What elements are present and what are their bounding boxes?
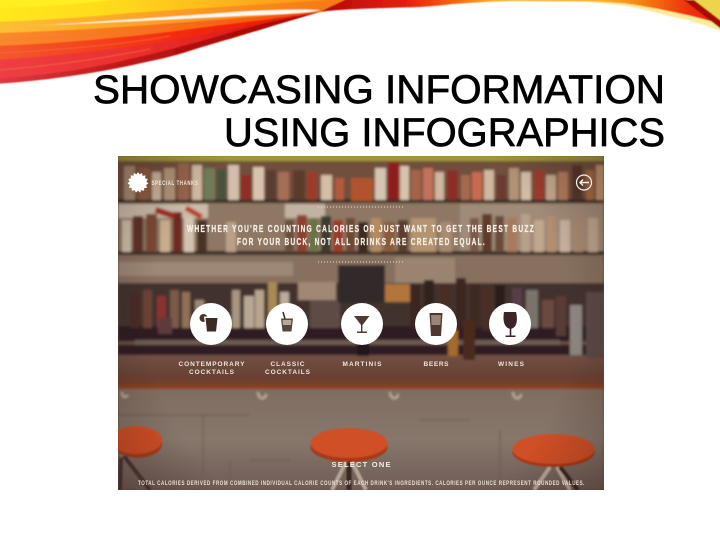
drink label: contemporary cocktails: COCKTAILS	[189, 369, 235, 376]
headline	[187, 224, 535, 248]
stool center	[310, 428, 388, 490]
title	[93, 68, 665, 155]
drink label: classic cocktails: COCKTAILS	[265, 369, 311, 376]
ribbon corner fold	[686, 0, 720, 22]
drink option: beers	[415, 303, 457, 345]
drink label: classic cocktails: CLASSIC	[270, 361, 305, 368]
title: USING INFOGRAPHICS	[224, 111, 665, 155]
drink label: contemporary cocktails: CONTEMPORARY	[178, 361, 245, 368]
drink label: wines: WINES	[498, 361, 525, 368]
stools	[110, 426, 594, 490]
drink label: contemporary cocktails	[178, 362, 244, 374]
icon: special thanks badge	[128, 172, 148, 193]
red accents behind second shelf	[155, 207, 175, 219]
icon: beer glass	[430, 313, 442, 336]
top shelf bottles	[124, 166, 135, 200]
drink option: martinis	[341, 303, 383, 345]
drink option: contemporary cocktails	[190, 303, 232, 345]
ribbon: top left flame swoosh	[0, 0, 372, 84]
wall tiles	[200, 414, 501, 446]
ribbon highlight streak	[30, 9, 320, 26]
counter dark post and bottles	[356, 344, 370, 357]
select one prompt: SELECT ONE	[332, 460, 390, 469]
stool right	[512, 434, 594, 490]
dotted divider bottom	[318, 262, 403, 263]
drink option: wines	[489, 303, 531, 345]
drink label: classic cocktails	[265, 362, 310, 374]
drink label: martinis: MARTINIS	[342, 361, 382, 368]
icon: wine glass	[503, 312, 517, 337]
photo panel: bar background with drink menu	[110, 155, 604, 490]
bar shelves photo	[118, 155, 604, 490]
ribbon: top right flame swoosh	[320, 0, 720, 32]
counter hooks	[122, 392, 521, 398]
lower row bottles	[130, 324, 140, 329]
icon: martini glass	[354, 316, 370, 333]
dotted divider top	[318, 206, 403, 208]
stool left	[118, 425, 163, 490]
drink option: classic cocktails	[266, 303, 308, 345]
drink label: beers: BEERS	[424, 361, 449, 368]
icon: contemporary cocktail glass	[200, 314, 218, 332]
ribbon stripes	[0, 28, 170, 70]
special thanks label: SPECIAL THANKS	[152, 180, 198, 187]
photo vignette	[118, 156, 604, 490]
icon: classic cocktail glass with straw	[281, 312, 293, 332]
second shelf bottles	[122, 220, 131, 252]
headline: FOR YOUR BUCK, NOT ALL DRINKS ARE CREATED EQUAL.	[237, 237, 486, 248]
title: SHOWCASING INFORMATION	[93, 68, 665, 112]
icon: back arrow	[576, 175, 592, 190]
headline: WHETHER YOU'RE COUNTING CALORIES OR JUST WANT TO GET THE BEST BUZZ	[187, 224, 535, 235]
